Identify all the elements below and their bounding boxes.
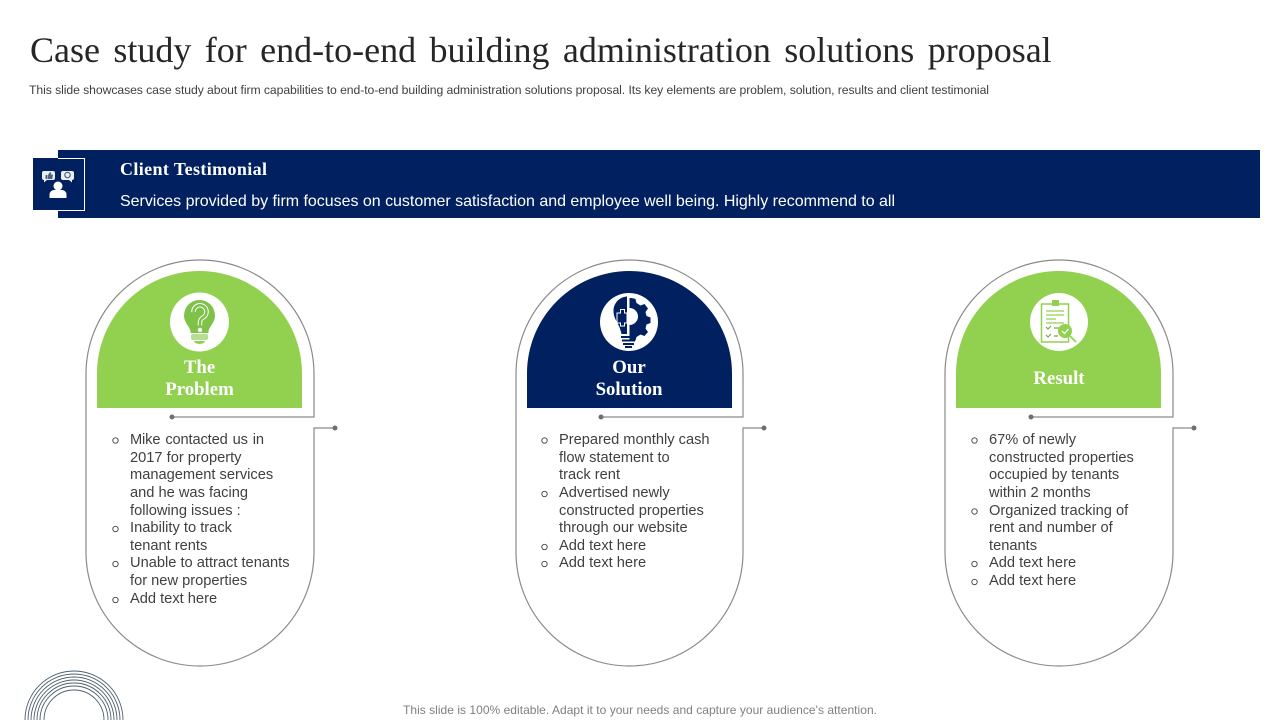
bullet list: management services: [130, 467, 273, 483]
bullet list: [972, 432, 1134, 589]
card heading: Solution: [596, 379, 663, 400]
bullet list: Organized tracking of: [989, 503, 1129, 519]
bullet list: for new properties: [130, 573, 247, 589]
title: Case study for end-to-end building administration solutions proposal: [30, 30, 1052, 70]
card heading: The: [184, 357, 215, 378]
bullet list: track rent: [559, 467, 620, 483]
bullet list: tenants: [989, 538, 1037, 554]
card header: [956, 271, 1161, 408]
bullet list: Inability to track: [130, 520, 233, 536]
bullet list: Advertised newly: [559, 485, 670, 501]
panel: result: [945, 260, 1196, 666]
subtitle: This slide showcases case study about firm capabilities to end-to-end building administration solutions proposal. Its key elements are problem, solution, results and client testimonial: [29, 83, 989, 97]
card outline: [945, 260, 1196, 666]
bullet list: constructed properties: [559, 503, 704, 519]
bullet list: Add text here: [130, 591, 217, 607]
bullet list: tenant rents: [130, 538, 207, 554]
bullet list: Prepared monthly cash: [559, 432, 710, 448]
testimonial heading: Client Testimonial: [120, 159, 267, 179]
bullet list: Add text here: [989, 555, 1076, 571]
bullet list: 67% of newly: [989, 432, 1077, 448]
bullet list: Unable to attract tenants: [130, 555, 290, 571]
card heading: Problem: [165, 379, 234, 400]
bullet list: through our website: [559, 520, 688, 536]
bullet list: 2017 for property: [130, 450, 242, 466]
testimonial text: Services provided by firm focuses on customer satisfaction and employee well being. Highly recommend to all: [120, 193, 895, 210]
testimonial banner: [58, 150, 1260, 218]
bullet list: [113, 432, 290, 607]
card outline: [86, 260, 338, 666]
bullet list: following issues :: [130, 503, 241, 519]
panel: client testimonial: [33, 150, 1260, 218]
bullet list: within 2 months: [988, 485, 1091, 501]
card outline: [516, 260, 766, 666]
card header: [97, 271, 302, 408]
bullet list: constructed properties: [989, 450, 1134, 466]
bullet list: flow statement to: [559, 450, 670, 466]
footer note: This slide is 100% editable. Adapt it to your needs and capture your audience's attention.: [403, 703, 877, 717]
panel: our solution: [516, 260, 766, 666]
bullet list: and he was facing: [130, 485, 248, 501]
card heading: Our: [612, 357, 646, 378]
bullet list: Add text here: [989, 573, 1076, 589]
card header: [527, 271, 732, 408]
bullet list: [542, 432, 710, 571]
panel: the problem: [86, 260, 338, 666]
card heading: Result: [1033, 368, 1085, 389]
icon: checklist with magnifier: [1030, 293, 1088, 351]
icon: question bulb: [170, 292, 229, 352]
bullet list: Mike contacted us in: [130, 432, 264, 448]
bullet list: Add text here: [559, 538, 646, 554]
bullet list: Add text here: [559, 555, 646, 571]
decorative concentric arcs: [25, 671, 123, 720]
testimonial icon: [33, 158, 85, 210]
bullet list: occupied by tenants: [989, 467, 1119, 483]
bullet list: rent and number of: [989, 520, 1114, 536]
icon: bulb with gear and puzzle: [600, 293, 658, 351]
